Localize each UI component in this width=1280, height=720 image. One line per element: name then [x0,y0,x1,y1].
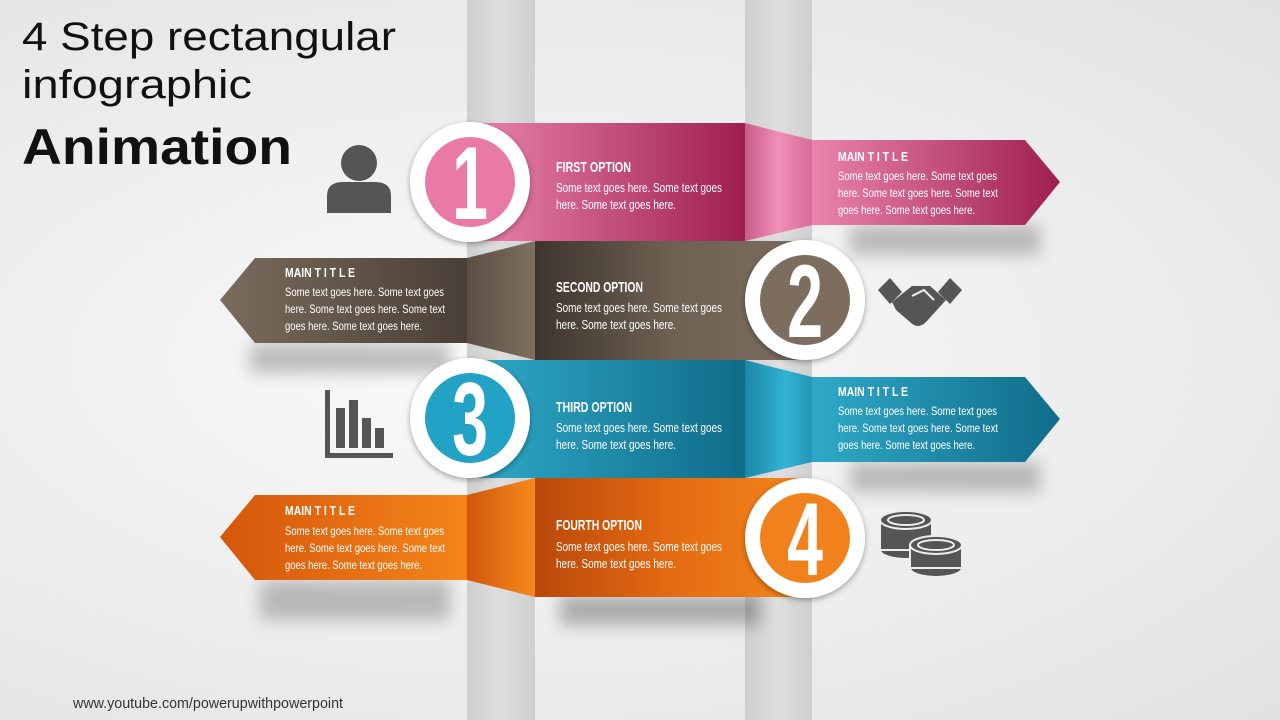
panel: row 2 brown: here. Some text goes here. [556,318,676,332]
panel: row 4 orange: Some text goes here. Some text goes [285,524,444,538]
panel: row 3 teal [470,360,1060,478]
panel: row 4 orange: here. Some text goes here. [556,557,676,571]
panel: row 2 brown: Some text goes here. Some text goes [556,301,722,315]
panel: row 1 pink: Some text goes here. Some text goes [838,169,997,183]
panel: row 1 pink: FIRST OPTION [556,159,631,176]
title [22,15,396,175]
panel: row 3 teal: MAIN T I T L E [838,385,908,399]
circle 1: 1 [452,126,488,242]
title: 4 Step rectangular [22,15,396,59]
panel: row 2 brown: SECOND OPTION [556,279,643,296]
icon: coins [880,511,962,577]
shadows [250,225,1040,625]
panel: row 1 pink: here. Some text goes here. Some text [838,186,999,200]
panel: row 1 pink: goes here. Some text goes here. [838,203,975,217]
panel: row 4 orange: FOURTH OPTION [556,517,642,534]
panel: row 3 teal: here. Some text goes here. [556,438,676,452]
panel: row 1 pink: Some text goes here. Some text goes [556,181,722,195]
title: infographic [22,63,252,107]
circle 3: 3 [452,362,488,478]
panel: row 2 brown: MAIN T I T L E [285,266,355,280]
circle 1 [410,122,530,242]
circle 2: 2 [787,244,823,360]
panel: row 1 pink: here. Some text goes here. [556,198,676,212]
panel: row 3 teal: goes here. Some text goes here. [838,438,975,452]
panel: row 2 brown: goes here. Some text goes here. [285,319,422,333]
panel: row 2 brown: here. Some text goes here. Some text [285,302,446,316]
panel: row 2 brown [220,241,812,360]
panel: row 3 teal: THIRD OPTION [556,399,632,416]
panel: row 2 brown: Some text goes here. Some text goes [285,285,444,299]
panel: row 4 orange: MAIN T I T L E [285,504,355,518]
panel: row 1 pink [470,123,1060,241]
circle 4 [745,478,865,598]
panel: row 3 teal: here. Some text goes here. Some text [838,421,999,435]
panel: row 1 pink: MAIN T I T L E [838,150,908,164]
panel: row 3 teal: Some text goes here. Some text goes [556,421,722,435]
footer url: www.youtube.com/powerupwithpowerpoint [72,695,344,712]
circle 2 [745,240,865,360]
panel: row 3 teal: Some text goes here. Some text goes [838,404,997,418]
panel: row 4 orange: Some text goes here. Some text goes [556,540,722,554]
icon: handshake [878,278,962,326]
title: Animation [22,119,292,175]
icon: bar chart [325,390,393,458]
panel: row 4 orange: here. Some text goes here. Some text [285,541,446,555]
panel: row 4 orange: goes here. Some text goes here. [285,558,422,572]
panel: row 4 orange [220,478,812,597]
icon: person [327,145,391,213]
circle 3 [410,358,530,478]
circle 4: 4 [787,482,823,598]
vertical strips [467,0,812,720]
